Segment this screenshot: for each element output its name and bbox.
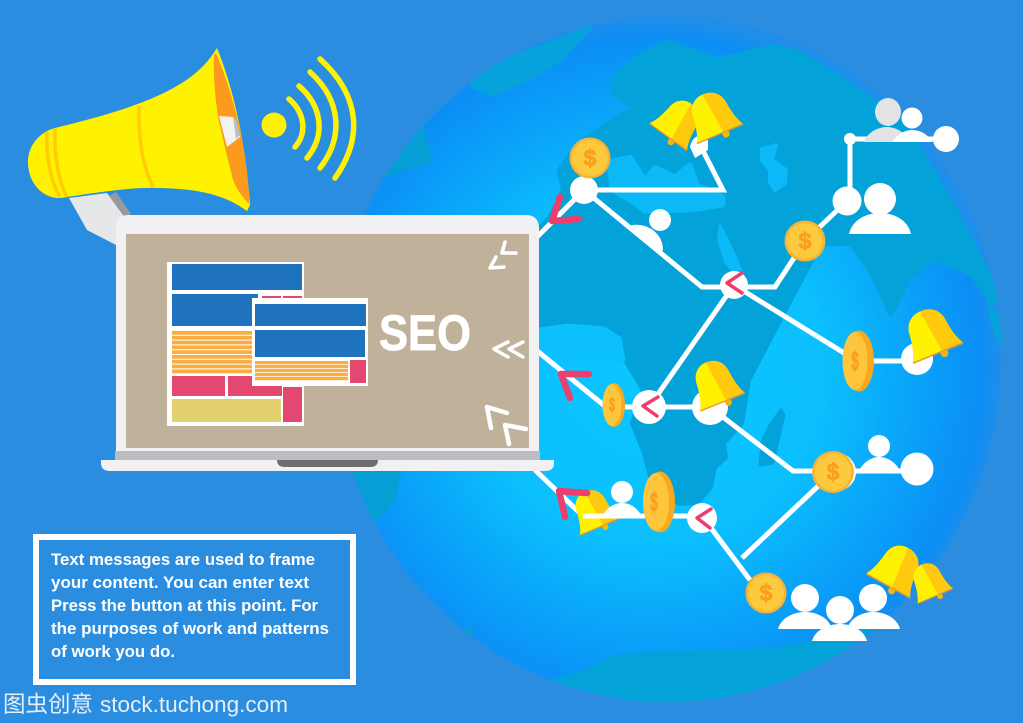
person: small centre (628, 209, 671, 254)
bell: lower large (863, 536, 931, 603)
watermark: 图虫创意 (3, 692, 93, 717)
land: Eurasia and Africa (530, 43, 1000, 503)
bell under line (565, 483, 622, 540)
land: upper-left patch (473, 27, 590, 95)
icon: megaphone (28, 48, 250, 246)
land: left patch (385, 128, 432, 178)
horn inner (214, 53, 249, 204)
laptop base (101, 460, 554, 471)
bell: centre (684, 353, 747, 417)
sea: Europe patch (609, 157, 723, 211)
globe (330, 16, 1003, 720)
coin (570, 138, 610, 178)
document back (167, 262, 304, 426)
megaphone horn (28, 48, 250, 211)
laptop notch (277, 460, 378, 467)
laptop screen (126, 234, 529, 448)
laptop (101, 215, 554, 471)
person: large (849, 183, 911, 234)
sea: Mediterranean opening (539, 325, 624, 360)
sea: Caspian patch (762, 145, 786, 190)
people group (778, 584, 900, 641)
text box copy: the purposes of work and patterns (51, 620, 329, 638)
coin: edge view (842, 330, 874, 392)
text box copy: of work you do. (51, 643, 175, 661)
person: top group (863, 98, 932, 142)
text box copy: Text messages are used to frame (51, 551, 315, 569)
coin: edge view lower (643, 472, 675, 532)
laptop lid (116, 215, 539, 451)
land: lower-left patch (352, 471, 402, 522)
icon: sound waves (289, 59, 354, 178)
SEO label: SEO (379, 305, 471, 361)
megaphone clip (109, 192, 131, 218)
pink chevrons in nodes (643, 273, 742, 528)
coin: edge view: $ (851, 347, 859, 376)
coin: $ (827, 459, 840, 485)
speaker (219, 116, 240, 147)
bell: lower small (904, 557, 955, 608)
megaphone handle (69, 193, 126, 246)
person: lower (602, 481, 642, 517)
coin (812, 451, 854, 493)
coin: edge view small (602, 383, 625, 427)
coin: edge view lower: $ (650, 488, 658, 517)
bell: right (896, 301, 966, 369)
coin: $ (799, 228, 812, 254)
person: right (858, 435, 901, 473)
white chevrons on screen (487, 242, 526, 444)
coin: $ (584, 145, 597, 171)
land: small south-west patch (464, 625, 474, 638)
bells: top pair (646, 85, 745, 155)
coin: $ (760, 580, 773, 606)
network lines (535, 139, 946, 580)
sea: Red sea (718, 225, 745, 280)
text box copy (51, 551, 329, 661)
land: Madagascar (760, 410, 784, 465)
watermark: stock.tuchong.com (100, 692, 288, 717)
coin (784, 220, 826, 262)
sound dot (262, 112, 286, 138)
document front (252, 298, 368, 386)
text box (36, 537, 353, 682)
pink arrows (552, 197, 589, 517)
line over bell (583, 514, 643, 518)
text box copy: Press the button at this point. For (51, 597, 319, 615)
land: south patch (553, 629, 874, 702)
land: right-edge patch (984, 294, 1002, 348)
network nodes (570, 126, 959, 533)
coin: edge view small: $ (609, 395, 615, 416)
horn stripes (47, 106, 153, 197)
coin (746, 572, 786, 614)
laptop hinge (115, 451, 540, 460)
text box copy: your content. You can enter text (51, 574, 310, 592)
